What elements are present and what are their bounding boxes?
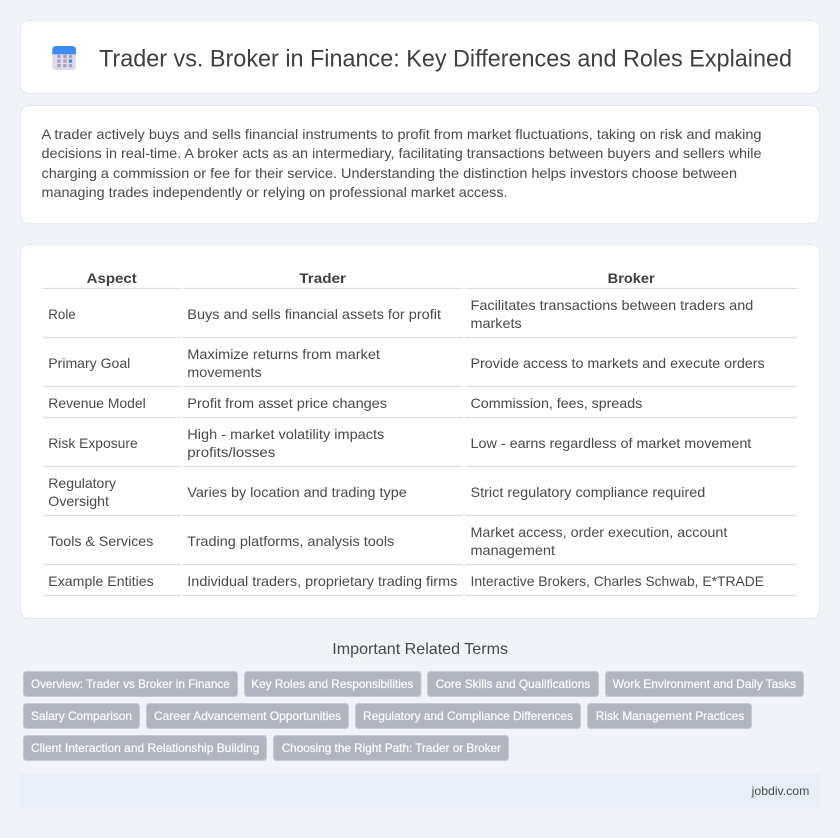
tag: client interaction: Client Interaction and Relationship Building xyxy=(31,741,259,755)
row: primary goal: Provide access to markets and execute orders xyxy=(470,355,765,371)
row: tools and services: management xyxy=(470,542,555,558)
tag: choosing path: Choosing the Right Path: Trader or Broker xyxy=(282,741,501,755)
table header row: Aspect xyxy=(87,270,137,286)
row: risk exposure: High - market volatility impacts xyxy=(187,426,384,442)
row: regulatory oversight xyxy=(48,475,705,509)
row: revenue model: Revenue Model xyxy=(48,395,146,411)
row: example entities xyxy=(48,573,764,589)
tag: risk management xyxy=(588,704,752,728)
row: risk exposure xyxy=(48,426,751,460)
table header row: Trader xyxy=(299,270,347,286)
row: revenue model: Commission, fees, spreads xyxy=(470,395,642,411)
tag: work environment: Work Environment and Daily Tasks xyxy=(613,677,796,691)
row: primary goal xyxy=(48,346,765,380)
text block: intro paragraph: managing trades independently or relying on professional market access. xyxy=(42,184,507,200)
table header row xyxy=(87,270,655,286)
tag: work environment xyxy=(606,672,804,696)
row: role: Buys and sells financial assets for profit xyxy=(187,306,441,322)
text block: intro paragraph: A trader actively buys and sells financial instruments to profit from market fluctuations, taking on risk and making xyxy=(42,126,762,142)
panel: comparison table xyxy=(20,244,820,618)
tag: career: Career Advancement Opportunities xyxy=(154,709,341,723)
row: tools and services: Tools & Services xyxy=(48,533,153,549)
text block: intro paragraph: charging a commission or fee for their service. Understanding the distinction helps investors choose between xyxy=(42,165,737,181)
tag: core skills: Core Skills and Qualifications xyxy=(436,677,590,691)
row: primary goal: movements xyxy=(187,364,262,380)
row: role: markets xyxy=(470,315,522,331)
tag: core skills xyxy=(428,672,598,696)
row: example entities: Individual traders, proprietary trading firms xyxy=(187,573,457,589)
tag: salary xyxy=(24,704,140,728)
row: role: Facilitates transactions between traders and xyxy=(470,297,753,313)
tag: overview: Overview: Trader vs Broker in Finance xyxy=(31,677,230,691)
text block: intro paragraph xyxy=(42,126,762,200)
row: role: Role xyxy=(48,306,76,322)
tag: career xyxy=(146,704,348,728)
panel: introduction xyxy=(20,106,820,224)
row: tools and services: Trading platforms, analysis tools xyxy=(187,533,394,549)
row: tools and services xyxy=(48,524,727,558)
row: risk exposure: Risk Exposure xyxy=(48,435,138,451)
row: primary goal: Maximize returns from market xyxy=(187,346,380,362)
row: tools and services: Market access, order execution, account xyxy=(470,524,727,540)
tag: choosing path xyxy=(274,736,508,760)
row: regulatory oversight: Regulatory xyxy=(48,475,116,491)
row: revenue model: Profit from asset price changes xyxy=(187,395,387,411)
row: revenue model xyxy=(48,395,642,411)
icon: calendar xyxy=(52,46,76,70)
tag: salary: Salary Comparison xyxy=(31,709,132,723)
tag: regulatory xyxy=(356,704,580,728)
row: regulatory oversight: Strict regulatory compliance required xyxy=(470,484,705,500)
footer xyxy=(20,774,820,808)
row: example entities: Example Entities xyxy=(48,573,154,589)
footer: jobdiv.com xyxy=(751,784,809,798)
tag: regulatory: Regulatory and Compliance Differences xyxy=(363,709,573,723)
tag: key roles xyxy=(244,672,421,696)
title: Trader vs. Broker in Finance: Key Differences and Roles Explained xyxy=(99,46,792,73)
row: example entities: Interactive Brokers, Charles Schwab, E*TRADE xyxy=(470,573,764,589)
table header row: Broker xyxy=(608,270,655,286)
tag: client interaction xyxy=(24,736,266,760)
heading: related terms: Important Related Terms xyxy=(332,641,508,658)
row: regulatory oversight: Oversight xyxy=(48,493,109,509)
panel: related term tags xyxy=(24,672,804,760)
tag: overview xyxy=(24,672,238,696)
row: risk exposure: profits/losses xyxy=(187,444,275,460)
row: regulatory oversight: Varies by location and trading type xyxy=(187,484,407,500)
panel: page header xyxy=(20,20,820,94)
tag: key roles: Key Roles and Responsibilities xyxy=(251,677,413,691)
text block: intro paragraph: decisions in real-time. A broker acts as an intermediary, facilitating transactions between buyers and sellers while xyxy=(42,145,762,161)
row: role xyxy=(48,297,753,331)
row: primary goal: Primary Goal xyxy=(48,355,130,371)
tag: risk management: Risk Management Practices xyxy=(596,709,744,723)
row: risk exposure: Low - earns regardless of market movement xyxy=(470,435,751,451)
